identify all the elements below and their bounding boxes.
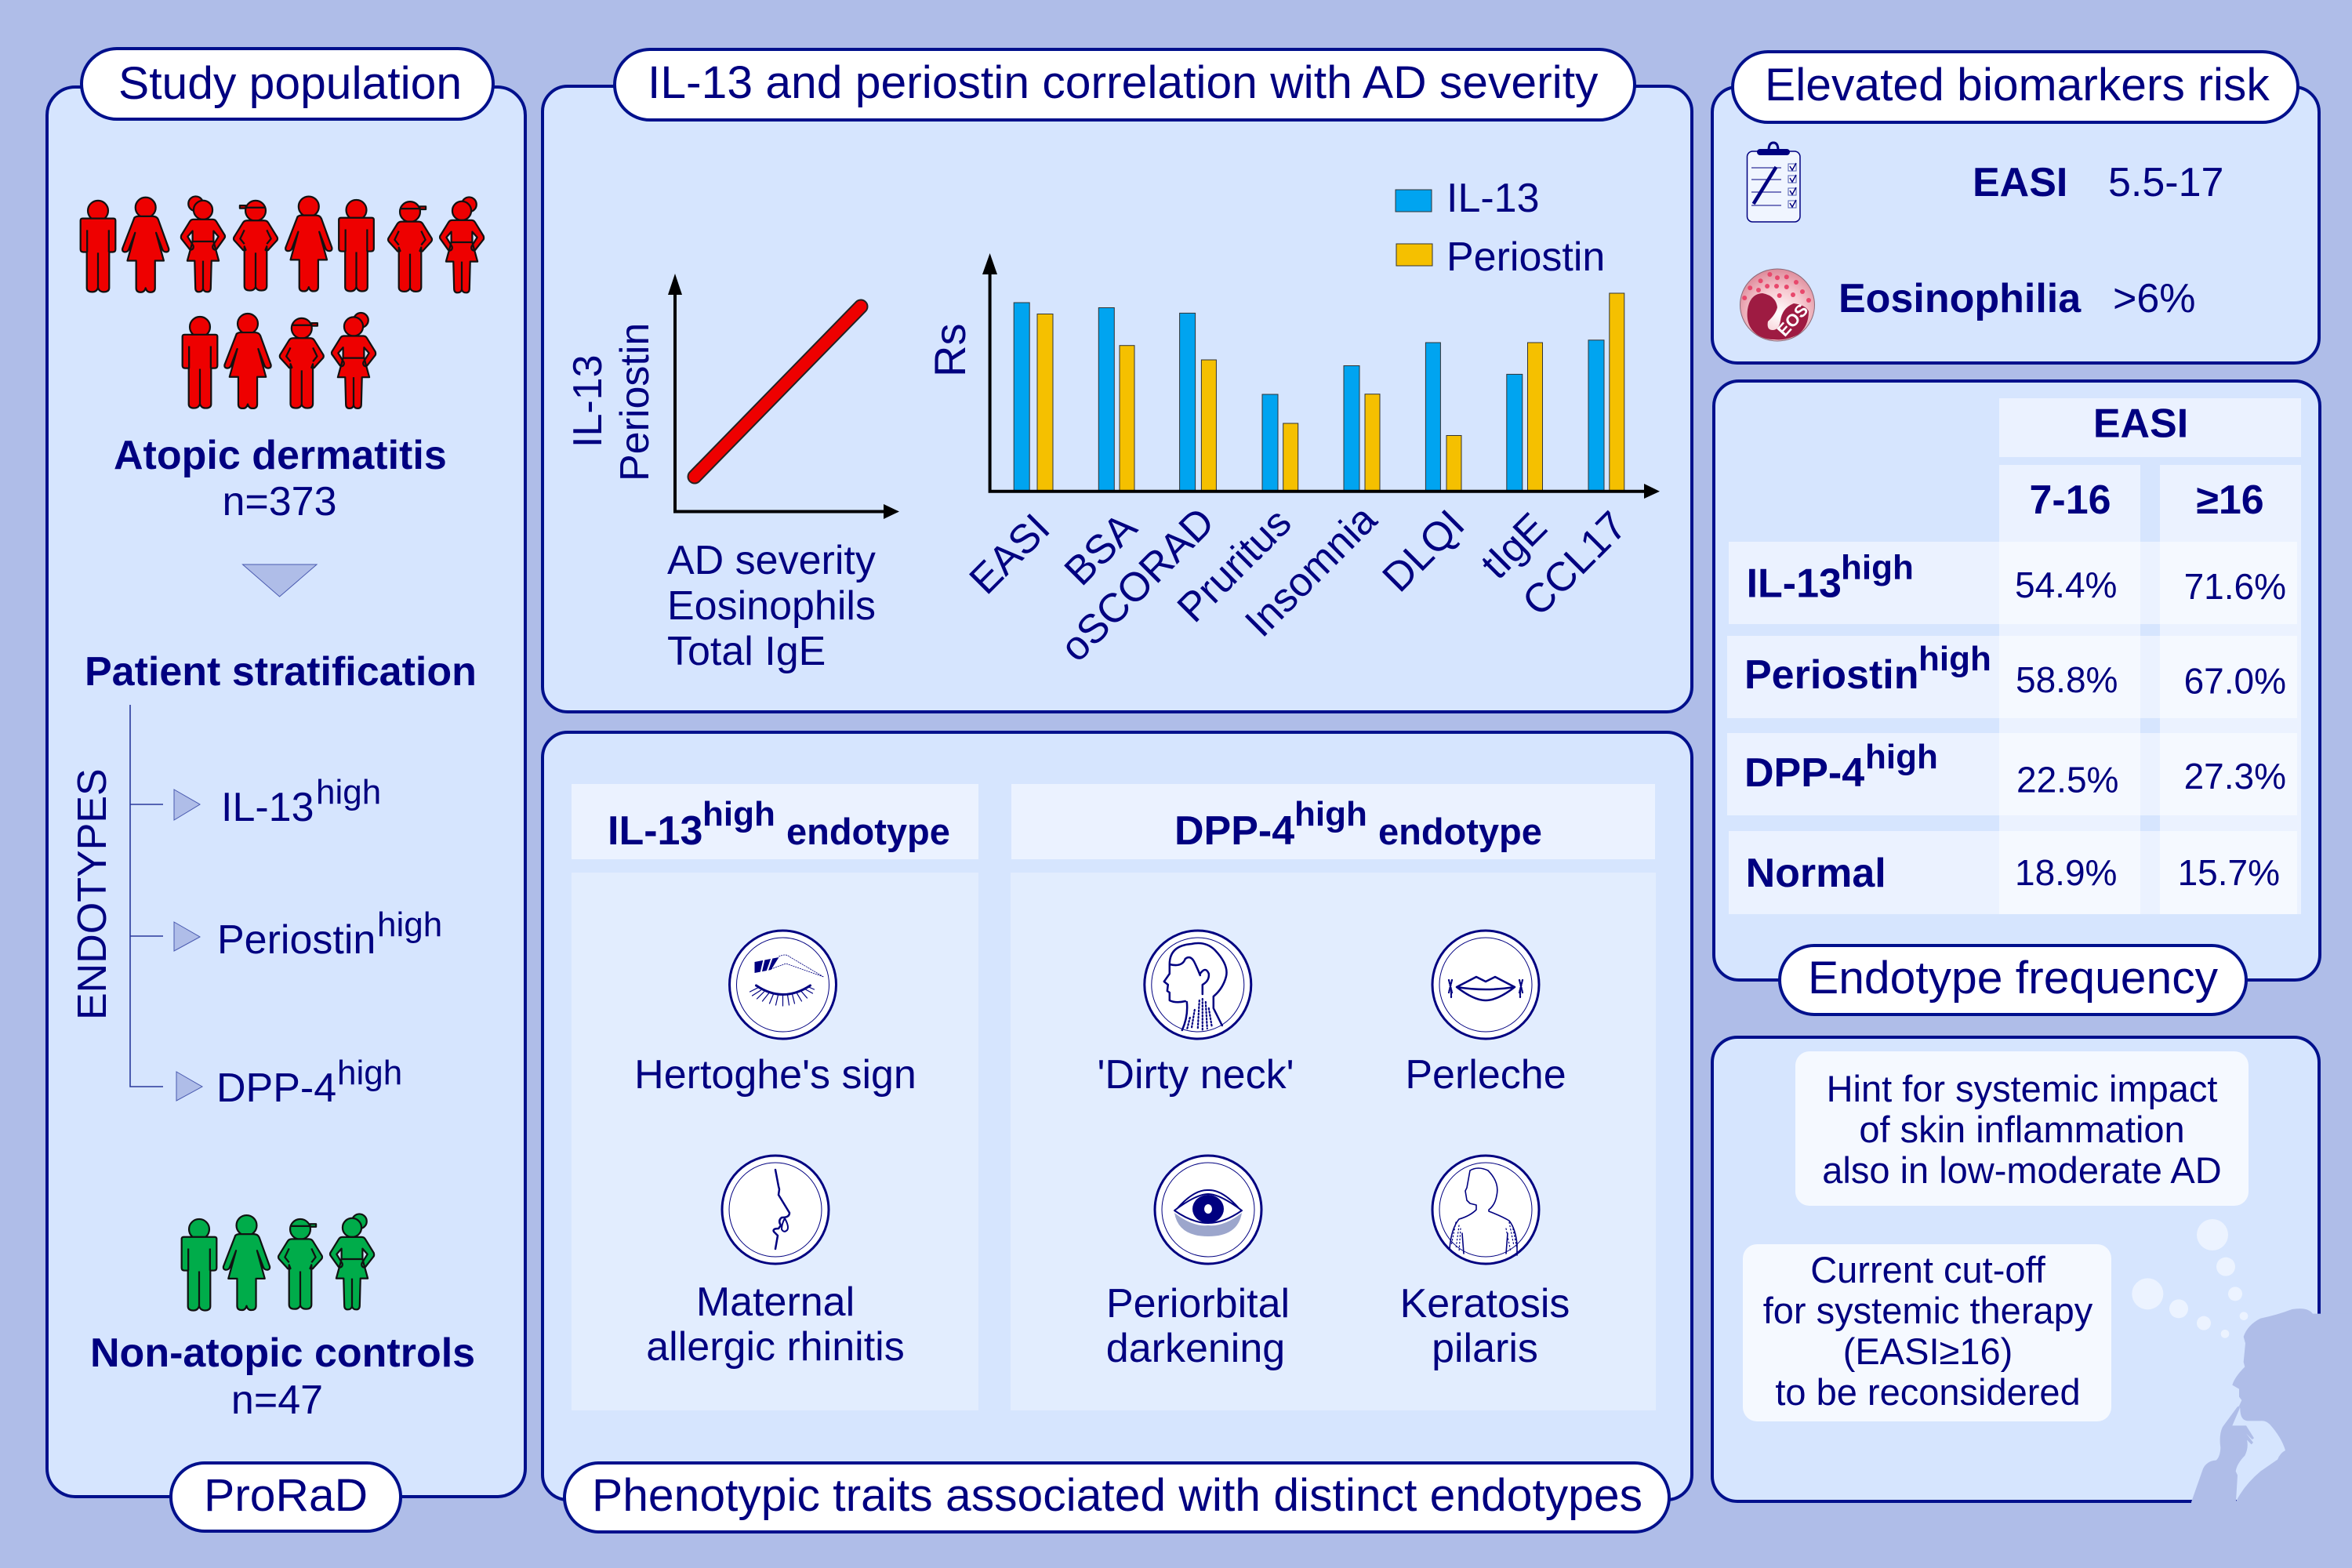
heading pill: correlation with AD severity: IL-13 and periostin correlation with AD severity [648,57,1599,108]
icons: non-atopic controls (green figures) [182,1214,374,1310]
panel box [1714,381,2320,980]
heading pill: elevated biomarkers risk: Elevated biomarkers risk [1765,60,2270,111]
table: endotype frequency by EASI: 54.4% [2015,564,2117,605]
panel: endotype frequency [1714,381,2320,1014]
text: eosinophilia >6%: >6% [2113,276,2196,321]
icon: perleche [1432,931,1539,1039]
endotype item: periostin high: Periostin [217,917,376,963]
callout: current cut-off: for systemic therapy [1763,1290,2093,1331]
callout: current cut-off [1743,1244,2111,1421]
heading pill: endotype frequency: Endotype frequency [1808,953,2219,1004]
label: keratosis pilaris: Keratosis [1400,1281,1570,1327]
text: EASI 5.5-17 [1973,160,2223,205]
label: keratosis pilaris [1400,1281,1570,1371]
legend: IL-13 [1446,176,1540,221]
panel box [47,87,525,1497]
category labels: tIgE [1472,504,1555,588]
icon: eosinophil cell [1740,269,1814,341]
heading pill: elevated biomarkers risk [1733,52,2298,122]
table: endotype frequency by EASI: EASI [2093,401,2188,447]
header: IL-13 high endotype: endotype [786,811,950,852]
heading pill: correlation with AD severity [615,49,1635,120]
callout: current cut-off: (EASI≥16) [1843,1330,2013,1372]
endotype item: DPP-4 high: DPP-4 [216,1065,336,1111]
label: periorbital darkening [1106,1281,1290,1371]
table: endotype frequency by EASI: Periostin [1744,652,1919,698]
x axis label: severity measures: Total IgE [667,629,826,674]
table: endotype frequency by EASI: DPP-4 [1744,750,1864,796]
header: IL-13 high endotype: IL-13 [608,808,702,854]
header: DPP-4 high endotype: endotype [1378,811,1542,852]
text: EASI 5.5-17: 5.5-17 [2108,160,2223,205]
icon: periorbital darkening [1155,1156,1261,1264]
thought bubbles [2132,1219,2248,1338]
icon: eosinophil cell: EOS [1773,300,1812,340]
axis label: Rs: Rs [925,324,975,377]
heading pill: study population [82,49,493,119]
label: perleche: Perleche [1405,1052,1566,1098]
x axis label: severity measures [667,538,876,674]
text: non-atopic controls count: n=47 [231,1377,323,1423]
endotype item: IL-13 high: IL-13 [221,785,314,830]
icon: keratosis pilaris [1432,1156,1539,1264]
label pill: ProRaD [171,1463,401,1531]
icon: clipboard [1747,143,1800,222]
table: endotype frequency by EASI: ≥16 [2196,477,2264,523]
header: IL-13 high endotype: high [702,795,775,833]
y axis label: IL-13 / periostin: Periostin [612,323,658,481]
table: endotype frequency by EASI: 27.3% [2184,756,2286,797]
arrow: down triangle [243,564,317,597]
category labels: Pruritus [1169,499,1300,631]
label: Hertoghe's sign: Hertoghe's sign [634,1052,916,1098]
heading pill: study population: Study population [118,58,462,109]
header: DPP-4 high endotype: DPP-4 [1174,808,1294,854]
table: endotype frequency by EASI: 22.5% [2016,760,2118,800]
label pill: ProRaD: ProRaD [204,1470,368,1521]
legend [1396,176,1605,280]
y axis label: IL-13 / periostin [565,323,658,481]
category labels: Insomnia [1236,496,1386,646]
endotype item: periostin high [174,906,442,963]
tree connector lines [130,705,163,1087]
table: endotype frequency by EASI: high [1841,549,1914,587]
panel: study population [47,49,525,1531]
icon: Hertoghe's sign [729,931,836,1039]
callout: hint for systemic impact: of skin inflammation [1859,1109,2185,1150]
callout: hint for systemic impact: Hint for systemic impact [1827,1068,2217,1109]
label: periorbital darkening: Periorbital [1106,1281,1290,1327]
heading pill: phenotypic traits: Phenotypic traits associated with distinct endotypes [592,1470,1642,1521]
endotype item: DPP-4 high: high [337,1054,402,1092]
panel box [543,732,1692,1500]
header: DPP-4 high endotype [1011,784,1655,859]
table: endotype frequency by EASI: 67.0% [2184,661,2286,702]
text: non-atopic controls count: Non-atopic controls [90,1330,475,1376]
endotype item: periostin high: high [377,906,442,944]
chart: correlation line [668,274,899,519]
x axis label: severity measures: AD severity [667,538,876,583]
endotype item: IL-13 high [174,773,381,830]
panel box [543,86,1692,712]
header: IL-13 high endotype [572,784,978,859]
category labels: oSCORAD [1052,499,1223,670]
y axis label: IL-13 / periostin: IL-13 [565,354,611,448]
box: DPP-4 traits [1011,873,1656,1410]
panel: phenotypic traits [543,732,1692,1532]
label: maternal allergic rhinitis: Maternal [696,1279,855,1325]
panel: interpretation [1712,1037,2352,1529]
label: dirty neck: 'Dirty neck' [1097,1052,1294,1098]
text: atopic dermatitis count [114,433,447,524]
endotype item: IL-13 high: high [316,773,381,811]
category labels: EASI [961,505,1058,603]
category labels: CCL17 [1514,503,1635,625]
label: maternal allergic rhinitis: allergic rhinitis [646,1324,905,1370]
text: atopic dermatitis count: n=373 [222,479,337,524]
text: non-atopic controls count [90,1330,475,1423]
icon: dirty neck [1145,931,1251,1039]
box: IL-13 traits [572,873,978,1410]
legend: Periostin [1446,234,1605,280]
callout: hint for systemic impact [1795,1051,2249,1206]
table: endotype frequency by EASI: 18.9% [2015,852,2117,893]
table: endotype frequency by EASI: 58.8% [2016,659,2118,700]
heading pill: endotype frequency [1780,946,2246,1014]
bar chart: Rs by measure [982,253,1660,499]
panel: elevated biomarkers risk [1712,52,2319,363]
category labels: DLQI [1374,501,1473,601]
table: endotype frequency by EASI: high [1865,738,1938,776]
category labels: BSA [1056,504,1146,594]
panel: IL-13 and periostin correlation [543,49,1692,712]
table: endotype frequency by EASI: IL-13 [1747,561,1842,607]
silhouette: thinking person [2191,1308,2352,1529]
text: eosinophilia >6%: Eosinophilia [1838,276,2082,321]
table: endotype frequency by EASI: 7-16 [2029,477,2111,523]
category labels [961,496,1635,670]
label: periorbital darkening: darkening [1106,1326,1285,1371]
callout: current cut-off: to be reconsidered [1775,1371,2081,1413]
icons: atopic dermatitis patients (red figures) [81,196,484,408]
table: endotype frequency by EASI [1727,398,2301,914]
text: atopic dermatitis count: Atopic dermatitis [114,433,447,478]
callout: current cut-off: Current cut-off [1810,1249,2046,1290]
x axis label: severity measures: Eosinophils [667,583,876,629]
table: endotype frequency by EASI: high [1918,640,1991,678]
table: endotype frequency by EASI: 71.6% [2184,566,2286,607]
text: eosinophilia >6% [1838,276,2196,321]
text: EASI 5.5-17: EASI [1973,160,2067,205]
label: endotypes: ENDOTYPES [70,768,115,1020]
callout: hint for systemic impact: also in low-moderate AD [1822,1149,2222,1191]
panel box [1712,1037,2319,1501]
header: DPP-4 high endotype: high [1294,795,1367,833]
icon: maternal allergic rhinitis [722,1156,829,1264]
table: endotype frequency by EASI: 15.7% [2178,852,2280,893]
endotype item: DPP-4 high [176,1054,402,1111]
heading: patient stratification: Patient stratification [85,649,477,695]
label: maternal allergic rhinitis [646,1279,905,1370]
panel box [1712,87,2319,363]
label: keratosis pilaris: pilaris [1432,1326,1538,1371]
table: endotype frequency by EASI: Normal [1746,851,1886,896]
